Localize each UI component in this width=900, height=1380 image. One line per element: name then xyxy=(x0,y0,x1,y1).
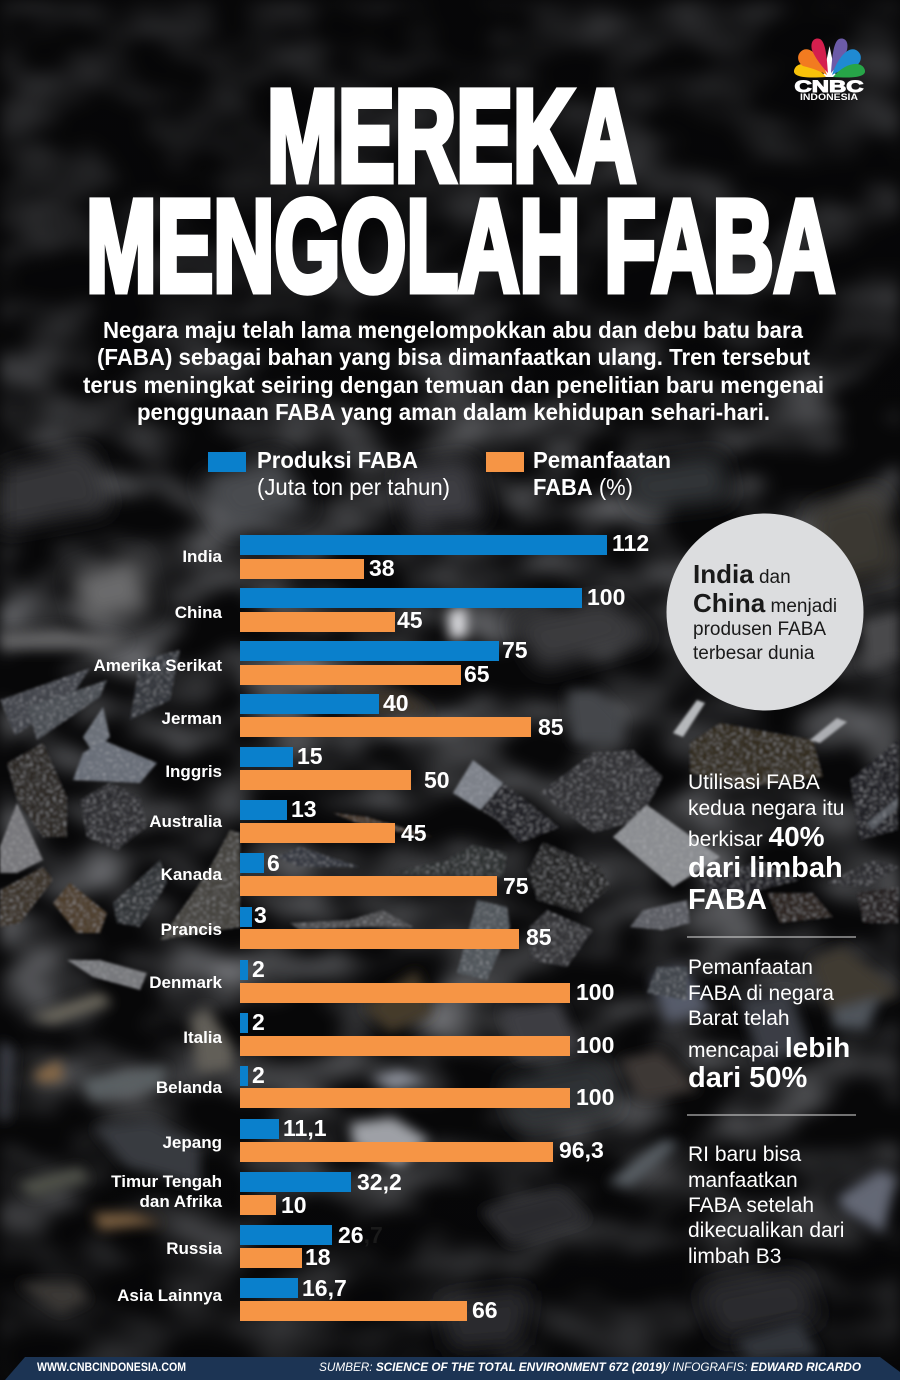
row: Asia Lainnya: 66 xyxy=(472,1297,498,1323)
side note: utilisasi: Utilisasi FABA xyxy=(688,771,820,794)
row: Asia Lainnya xyxy=(117,1275,498,1323)
side note: RI: RI baru bisa xyxy=(688,1143,802,1166)
row: India: India xyxy=(182,547,223,566)
row: Inggris: 15 xyxy=(297,743,323,769)
logo: CNBC Indonesia xyxy=(794,39,865,103)
row: Timur Tengah dan Afrika: dan Afrika xyxy=(139,1192,223,1211)
side note: pemanfaatan: Pemanfaatan xyxy=(688,956,813,979)
row: Prancis: 85 xyxy=(526,924,552,950)
row: Denmark: 100 xyxy=(576,979,614,1005)
row: Asia Lainnya: 16,7 xyxy=(302,1275,347,1301)
side note: RI: dikecualikan dari xyxy=(688,1219,844,1242)
side note: RI: manfaatkan xyxy=(688,1169,798,1192)
row: Denmark: 2 xyxy=(252,956,265,982)
row: India xyxy=(182,530,649,581)
row: Timur Tengah dan Afrika: 32,2 xyxy=(357,1169,402,1195)
row: Russia xyxy=(166,1222,383,1270)
row: Kanada: Kanada xyxy=(161,865,223,884)
intro paragraph: (FABA) sebagai bahan yang bisa dimanfaatkan ulang. Tren tersebut xyxy=(97,344,810,370)
row: Jerman: 85 xyxy=(538,714,564,740)
side note: utilisasi xyxy=(688,771,844,916)
side note: utilisasi: kedua negara itu xyxy=(688,797,844,820)
side note: utilisasi: dari limbah xyxy=(688,852,843,884)
row: Timur Tengah dan Afrika: Timur Tengah xyxy=(111,1172,222,1191)
legend: produksi: Produksi FABA xyxy=(257,447,418,473)
footer: source: SUMBER: SCIENCE OF THE TOTAL ENVIRONMENT 672 (2019)/ INFOGRAFIS: EDWARD RICARDO xyxy=(319,1360,862,1374)
row: Timur Tengah dan Afrika: 10 xyxy=(281,1192,307,1218)
row: Amerika Serikat: 75 xyxy=(502,637,528,663)
row: Australia: 45 xyxy=(401,820,427,846)
logo: CNBC Indonesia: INDONESIA xyxy=(800,92,858,103)
side note: pemanfaatan: Barat telah xyxy=(688,1007,790,1030)
row: China: 100 xyxy=(587,584,625,610)
side note: RI: limbah B3 xyxy=(688,1245,781,1268)
footer: website: WWW.CNBCINDONESIA.COM xyxy=(37,1360,186,1374)
row: Amerika Serikat: Amerika Serikat xyxy=(93,656,222,675)
row: Italia: 100 xyxy=(576,1032,614,1058)
side note: utilisasi: berkisar 40% xyxy=(688,821,825,852)
title xyxy=(86,62,835,319)
row: Kanada xyxy=(161,850,529,899)
row: Asia Lainnya: Asia Lainnya xyxy=(117,1286,223,1305)
row: Inggris: 50 xyxy=(424,767,450,793)
side note: RI: FABA setelah xyxy=(688,1194,814,1217)
row: Denmark xyxy=(149,956,614,1005)
row: Jepang xyxy=(162,1115,604,1163)
row: Italia: 2 xyxy=(252,1009,265,1035)
side note: pemanfaatan: mencapai lebih xyxy=(688,1032,850,1063)
callout: India and China circle: terbesar dunia xyxy=(693,643,815,664)
legend xyxy=(208,447,671,500)
row: Russia: 26,7 xyxy=(338,1222,383,1248)
side note: pemanfaatan: dari 50% xyxy=(688,1062,807,1094)
row: China: 45 xyxy=(397,607,423,633)
callout: India and China circle: India dan xyxy=(693,559,791,589)
footer bar xyxy=(5,1357,900,1380)
row: Belanda: 2 xyxy=(252,1062,265,1088)
legend: pemanfaatan: Pemanfaatan xyxy=(533,447,671,473)
intro paragraph: terus meningkat seiring dengan temuan dan penelitian baru mengenai xyxy=(83,372,824,398)
row: Kanada: 6 xyxy=(267,850,280,876)
row: Kanada: 75 xyxy=(503,873,529,899)
row: China xyxy=(175,584,625,633)
row: Australia xyxy=(149,796,427,846)
legend: pemanfaatan: FABA (%) xyxy=(533,474,633,500)
legend: pemanfaatan xyxy=(486,447,671,500)
row: Jepang: 11,1 xyxy=(283,1115,327,1141)
row: India: 38 xyxy=(369,555,395,581)
callout: India and China circle xyxy=(666,514,864,710)
row: Jerman: 40 xyxy=(383,690,409,716)
callout: India and China circle: produsen FABA xyxy=(693,619,826,640)
legend: produksi xyxy=(208,447,450,500)
side note: pemanfaatan xyxy=(688,956,850,1094)
row: Inggris xyxy=(165,743,450,793)
title: MEREKA xyxy=(267,62,636,209)
side note: utilisasi: FABA xyxy=(688,884,767,916)
peacock petals xyxy=(794,39,865,78)
row: Amerika Serikat: 65 xyxy=(464,661,490,687)
row: Prancis: Prancis xyxy=(161,920,222,939)
wordmark: CNBC xyxy=(794,77,864,96)
row: Jerman: Jerman xyxy=(162,709,222,728)
row: Belanda: Belanda xyxy=(156,1078,223,1097)
row: Australia: 13 xyxy=(291,796,317,822)
row: Jepang: 96,3 xyxy=(559,1137,604,1163)
legend: produksi: (Juta ton per tahun) xyxy=(257,474,450,500)
intro paragraph: Negara maju telah lama mengelompokkan abu dan debu batu bara xyxy=(103,317,803,343)
side note: RI xyxy=(688,1143,844,1268)
row: Timur Tengah dan Afrika xyxy=(111,1169,402,1218)
row: Jerman xyxy=(162,690,564,740)
intro paragraph: penggunaan FABA yang aman dalam kehidupan sehari-hari. xyxy=(137,399,770,425)
row: Belanda: 100 xyxy=(576,1084,614,1110)
row: Russia: Russia xyxy=(166,1239,223,1258)
row: Jepang: Jepang xyxy=(162,1133,222,1152)
row: Russia: 18 xyxy=(305,1244,331,1270)
row: Prancis: 3 xyxy=(254,902,267,928)
row: China: China xyxy=(175,603,223,622)
row: India: 112 xyxy=(612,530,649,556)
callout: India and China circle: China menjadi xyxy=(693,588,837,618)
row: Prancis xyxy=(161,902,552,950)
row: Denmark: Denmark xyxy=(149,973,223,992)
row: Inggris: Inggris xyxy=(165,762,222,781)
row: Amerika Serikat xyxy=(93,637,528,687)
row: Italia: Italia xyxy=(183,1028,223,1047)
bar chart xyxy=(93,530,649,1323)
row: Italia xyxy=(183,1009,614,1058)
row: Belanda xyxy=(156,1062,614,1110)
intro paragraph xyxy=(83,317,824,425)
side note: pemanfaatan: FABA di negara xyxy=(688,982,834,1005)
row: Australia: Australia xyxy=(149,812,223,831)
